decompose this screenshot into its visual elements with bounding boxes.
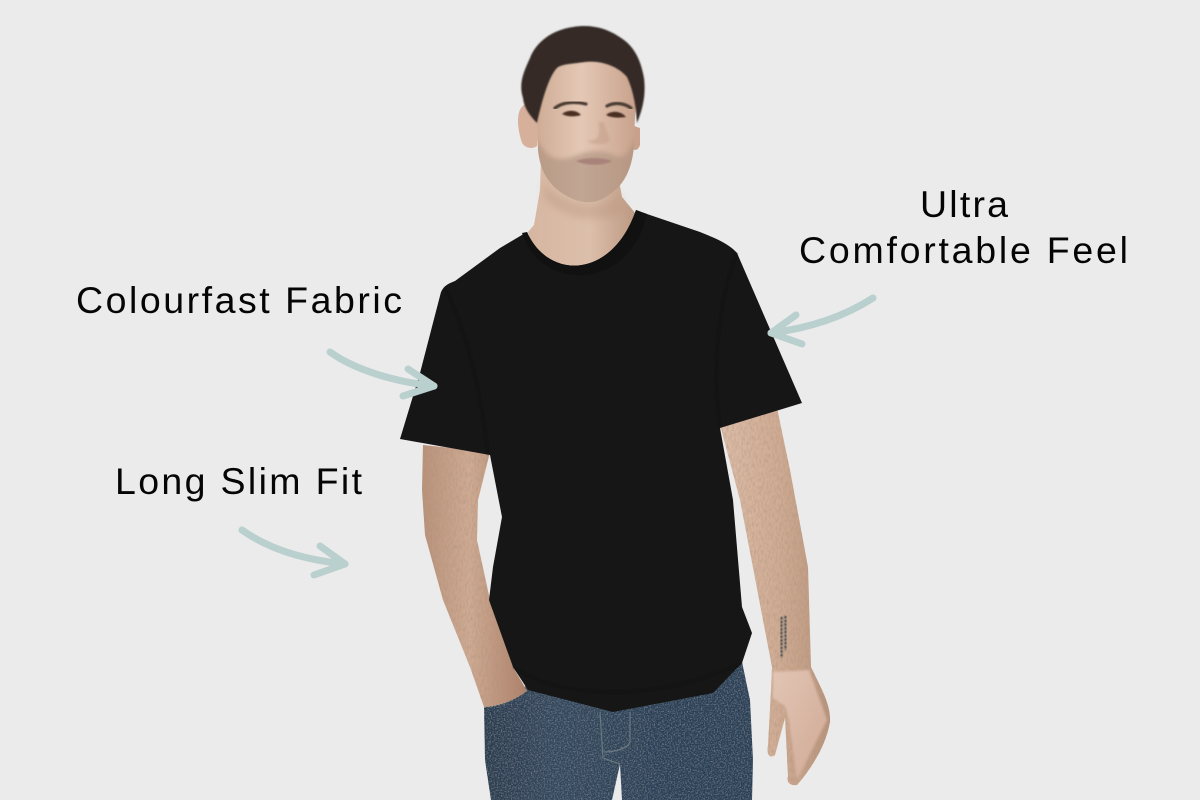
label: Ultra Comfortable Feel: Ultra [920, 183, 1008, 225]
arrow: to right sleeve [771, 298, 873, 344]
eyebrows [555, 102, 631, 108]
hair [521, 26, 645, 123]
label: Long Slim Fit: Long Slim Fit [115, 460, 363, 502]
black t-shirt [400, 210, 802, 712]
hand highlight [773, 670, 827, 780]
stubble [538, 140, 634, 202]
arrow: to sleeve [330, 352, 434, 396]
mouth [576, 158, 612, 165]
neck [528, 160, 640, 270]
nose [586, 122, 610, 144]
face [537, 50, 636, 202]
right arm and hand [720, 408, 830, 785]
collar ribbing [522, 210, 647, 275]
sleeve seams [445, 253, 737, 455]
hem [513, 663, 742, 692]
man wearing black t-shirt [400, 26, 830, 800]
eyes [562, 111, 626, 118]
label: Ultra Comfortable Feel [799, 183, 1128, 271]
label: Colourfast Fabric: Colourfast Fabric [76, 279, 402, 321]
jeans [484, 662, 753, 800]
arrow: to body side [242, 530, 345, 575]
neck shadow under jaw [544, 182, 624, 219]
wrist tattoo [781, 616, 786, 658]
left arm in pocket [422, 445, 527, 707]
label: Ultra Comfortable Feel: Comfortable Feel [799, 229, 1128, 271]
ears [518, 104, 640, 150]
